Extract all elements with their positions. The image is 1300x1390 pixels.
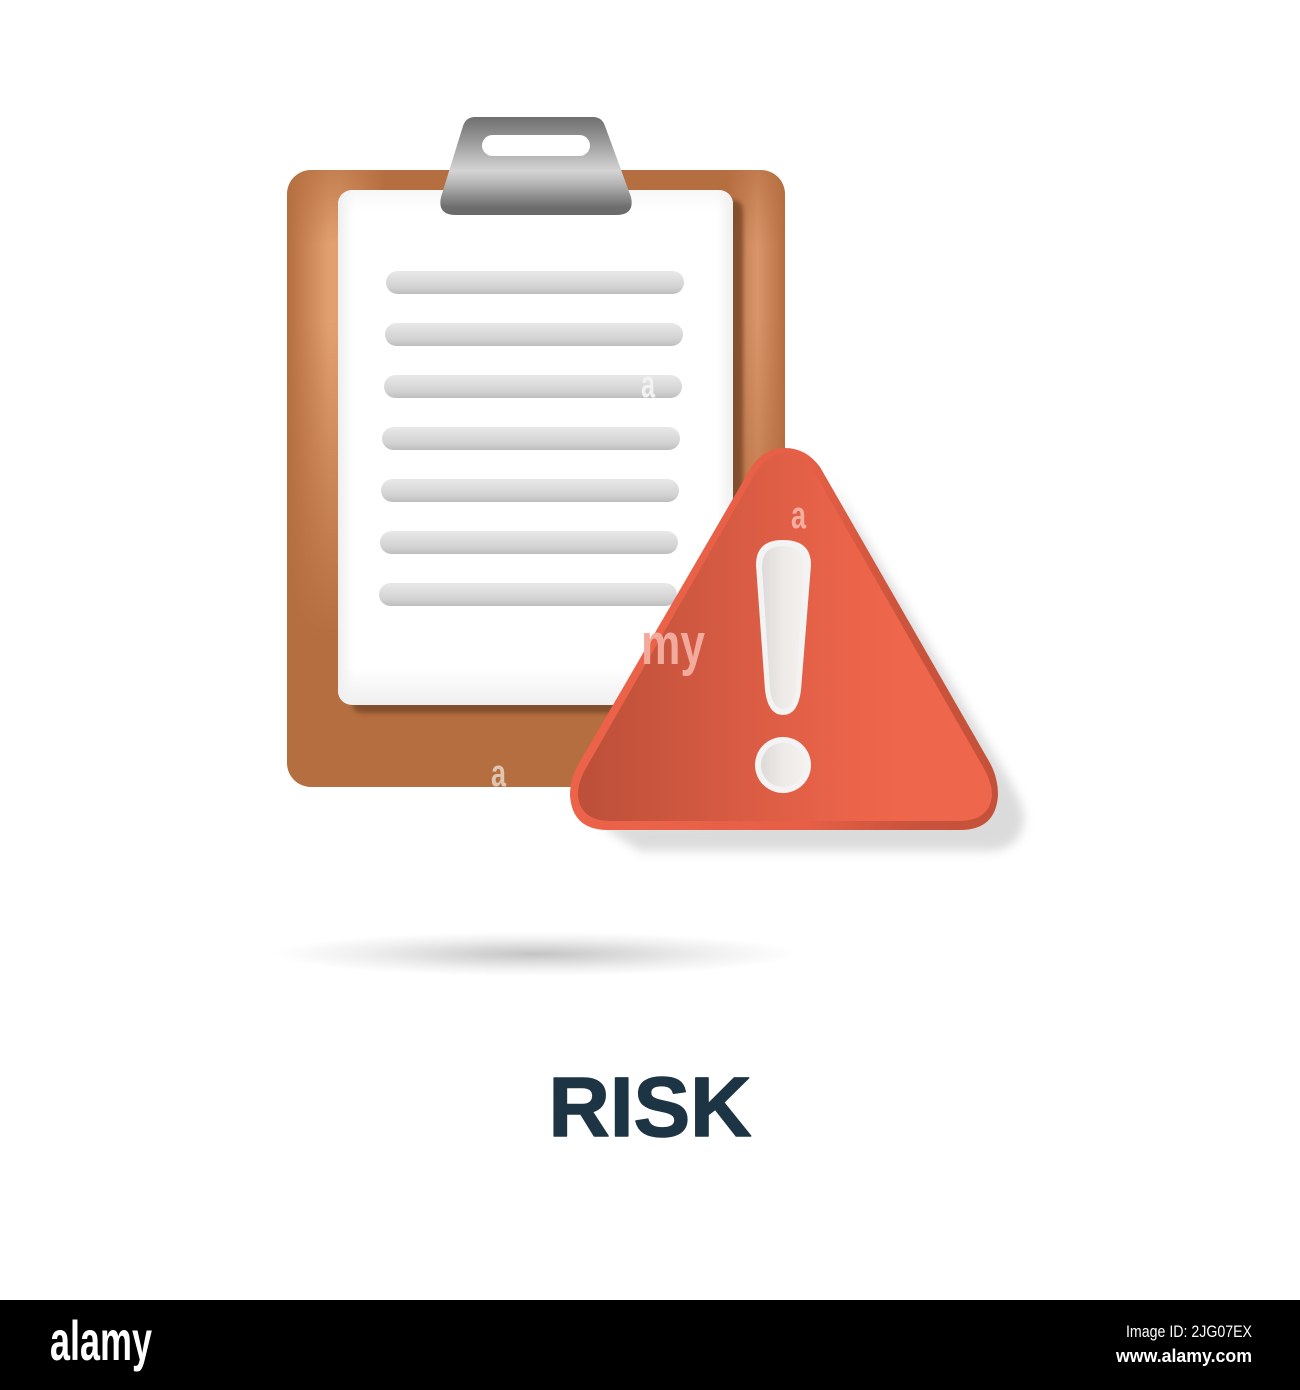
triangle rim xyxy=(570,448,998,830)
footer bar xyxy=(0,1300,1300,1390)
warning triangle xyxy=(570,448,1024,851)
clipboard board xyxy=(287,170,785,787)
triangle face xyxy=(578,453,992,821)
title: RISK xyxy=(548,1060,752,1154)
website: www.alamy.com xyxy=(1115,1346,1252,1366)
metal clip xyxy=(440,117,632,215)
exclamation bar xyxy=(756,540,811,715)
watermark fragments: a xyxy=(791,495,807,537)
watermark fragments: my xyxy=(641,612,705,677)
triangle shadow xyxy=(600,480,1024,851)
floor shadow xyxy=(273,932,797,976)
watermark fragments: a xyxy=(491,753,507,795)
exclamation dot xyxy=(755,737,811,793)
image id: Image ID: 2JG07EX xyxy=(1126,1322,1252,1341)
watermark fragments: a xyxy=(641,364,656,406)
text lines xyxy=(379,271,684,606)
clipboard xyxy=(287,117,785,787)
paper sheet xyxy=(338,190,733,705)
footer logo: alamy xyxy=(50,1309,152,1372)
watermark fragments xyxy=(491,364,807,795)
